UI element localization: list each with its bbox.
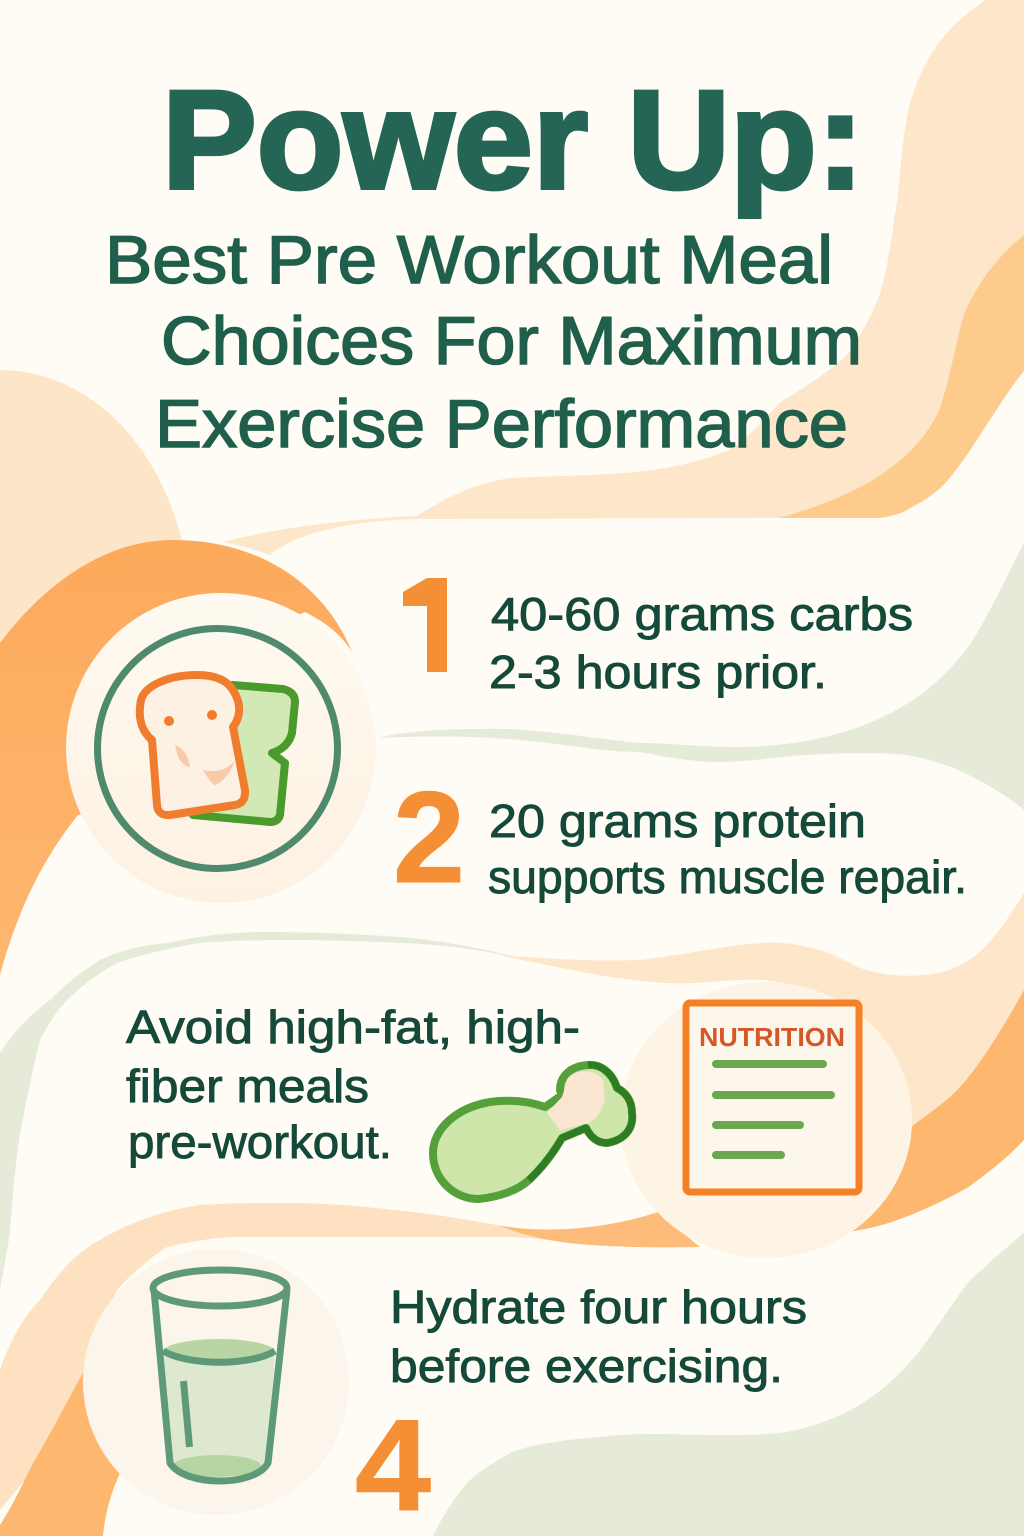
- step 2 text: [488, 795, 967, 903]
- number 1: 1: [392, 554, 464, 700]
- step 4 line 2: before exercising.: [390, 1340, 783, 1392]
- drumstick bone: [547, 1072, 605, 1130]
- green bread slice: [193, 685, 295, 822]
- subtitle line 1: Best Pre Workout Meal: [105, 222, 833, 298]
- step 3 text: [126, 1001, 580, 1168]
- wave: orange band under text: [500, 1212, 700, 1247]
- step 4 text: [390, 1281, 807, 1392]
- glass rim: [153, 1270, 287, 1306]
- step 1 text: [489, 588, 913, 698]
- icon: chicken drumstick: [433, 1065, 632, 1199]
- bread eye left: [164, 716, 174, 726]
- icon: bread in ring: [66, 593, 376, 903]
- wave: pale green left strip: [0, 932, 520, 1290]
- wave: lower peach band: [0, 1203, 600, 1510]
- subtitle line 3: Exercise Performance: [155, 386, 848, 462]
- icon backdrop circle: [620, 982, 912, 1258]
- drumstick shaded edge: [529, 1065, 632, 1180]
- green ring: [98, 628, 338, 868]
- step 3 line 3: pre-workout.: [128, 1116, 392, 1168]
- step 2 line 1: 20 grams protein: [489, 795, 866, 847]
- step 4 line 1: Hydrate four hours: [390, 1281, 807, 1333]
- icon backdrop circle: [66, 593, 376, 903]
- glass sides and base: [154, 1290, 287, 1481]
- step 3 line 2: fiber meals: [126, 1060, 369, 1112]
- subtitle line 2: Choices For Maximum: [161, 303, 862, 379]
- bread eye right: [207, 710, 217, 720]
- wave: top right light peach: [223, 0, 1024, 555]
- label heading: NUTRITION: [699, 1022, 845, 1052]
- number 4: 4: [355, 1392, 431, 1536]
- icon: water glass: [83, 1249, 349, 1515]
- icon backdrop circle: [83, 1249, 349, 1515]
- bread smear right: [203, 760, 235, 785]
- title: Power Up:: [162, 61, 864, 218]
- orange bread slice: [140, 675, 245, 815]
- wave: mid peach band: [498, 893, 1024, 1130]
- step 3 line 1: Avoid high-fat, high-: [126, 1001, 580, 1053]
- bread smear left: [175, 745, 190, 767]
- number 2: 2: [393, 764, 465, 910]
- wave: orange lower left: [0, 1360, 150, 1536]
- label lines: [716, 1064, 831, 1155]
- water surface: [163, 1339, 275, 1365]
- drumstick outline: [433, 1065, 632, 1199]
- water line: [163, 1351, 275, 1362]
- wave: orange band right: [850, 990, 1024, 1232]
- icon: nutrition label: [620, 982, 912, 1258]
- water body: [163, 1353, 275, 1476]
- step 1 line 2: 2-3 hours prior.: [489, 646, 827, 698]
- water bottom: [173, 1455, 261, 1477]
- label sheet: [686, 1003, 859, 1192]
- wave: left peach blob: [0, 370, 200, 700]
- wave: pale green right: [378, 543, 1024, 810]
- wave: orange crescent left: [0, 540, 352, 975]
- step 2 line 2: supports muscle repair.: [488, 851, 967, 903]
- wave: top right darker peach: [779, 235, 1024, 518]
- wave: pale green bottom right: [433, 1232, 1024, 1536]
- subtitle: [105, 222, 862, 462]
- glass highlight: [184, 1381, 190, 1447]
- step 1 line 1: 40-60 grams carbs: [491, 588, 913, 640]
